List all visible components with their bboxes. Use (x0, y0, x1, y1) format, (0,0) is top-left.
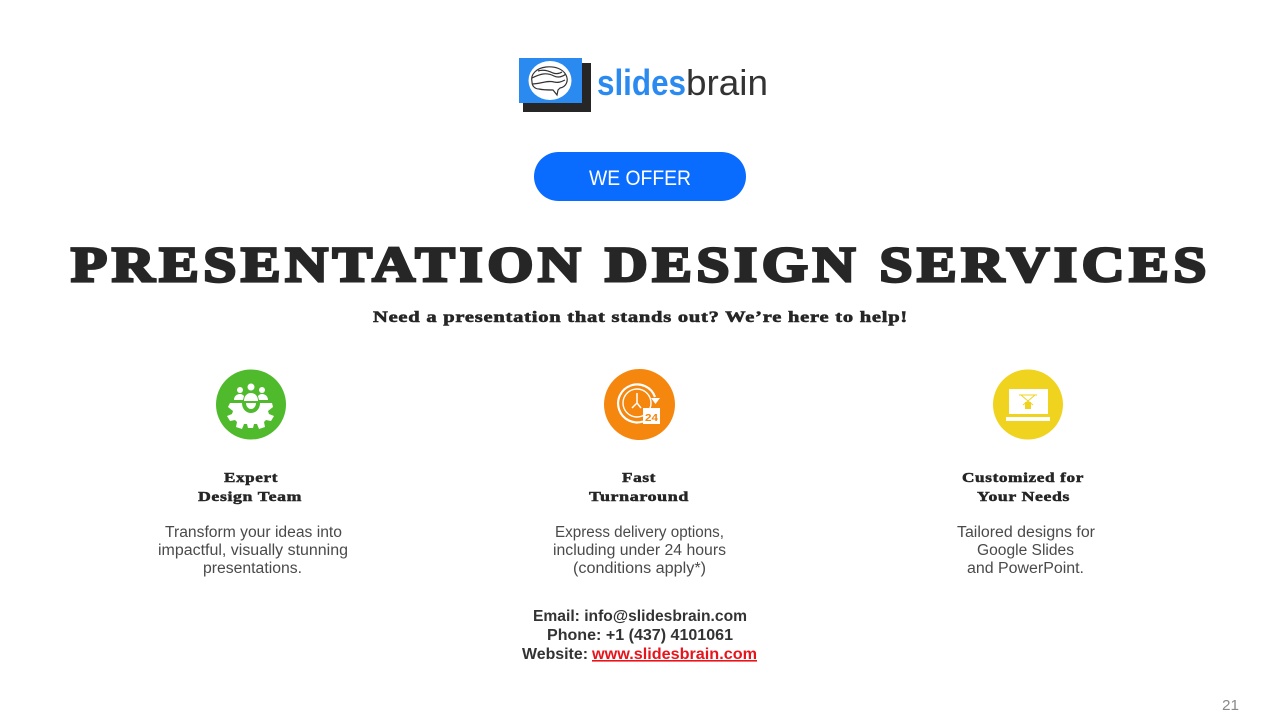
contact details: Email: info@slidesbrain.com (533, 608, 747, 625)
description: Tailored designs for (957, 524, 1095, 541)
logo: slidesbrain (519, 58, 768, 112)
description: impactful, visually stunning (158, 542, 348, 559)
icon: team gear (216, 370, 286, 440)
heading: Fast (622, 471, 656, 486)
description: Google Slides (977, 542, 1074, 559)
logo shadow (523, 63, 591, 112)
description (957, 524, 1095, 577)
logo wordmark (597, 62, 768, 103)
badge: we offer (534, 152, 746, 201)
heading: Your Needs (977, 490, 1070, 505)
logo wordmark: brain (686, 62, 768, 103)
page number: 21 (1222, 697, 1239, 714)
description (553, 524, 726, 577)
subtitle: Need a presentation that stands out? We’re here to help! (373, 309, 908, 326)
heading: Turnaround (589, 490, 689, 505)
icon: 24 hour clock: 24 (645, 413, 659, 424)
title: PRESENTATION DESIGN SERVICES (71, 236, 1211, 292)
panel: fast turnaround (553, 369, 726, 577)
description: and PowerPoint. (967, 560, 1084, 577)
description: presentations. (203, 560, 302, 577)
description: including under 24 hours (553, 542, 726, 559)
contact details: www.slidesbrain.com (591, 646, 757, 663)
heading (589, 471, 689, 505)
heading: Design Team (198, 490, 302, 505)
panel: expert design team (158, 370, 348, 577)
badge: we offer: WE OFFER (589, 167, 691, 190)
contact details: Phone: +1 (437) 4101061 (547, 627, 733, 644)
heading: Expert (224, 471, 278, 486)
icon: 24 hour clock (604, 369, 675, 440)
contact details: Website: (522, 646, 588, 663)
heading (198, 471, 302, 505)
description: Express delivery options, (555, 524, 724, 541)
logo brain icon (528, 61, 572, 100)
logo wordmark: slides (597, 62, 686, 103)
description: (conditions apply*) (573, 560, 706, 577)
description (158, 524, 348, 577)
description: Transform your ideas into (165, 524, 342, 541)
panel: customized for your needs (957, 370, 1095, 577)
contact details (522, 608, 757, 663)
heading (962, 471, 1084, 505)
icon: laptop with drone (993, 370, 1063, 440)
heading: Customized for (962, 471, 1084, 486)
logo blue square (519, 58, 582, 103)
